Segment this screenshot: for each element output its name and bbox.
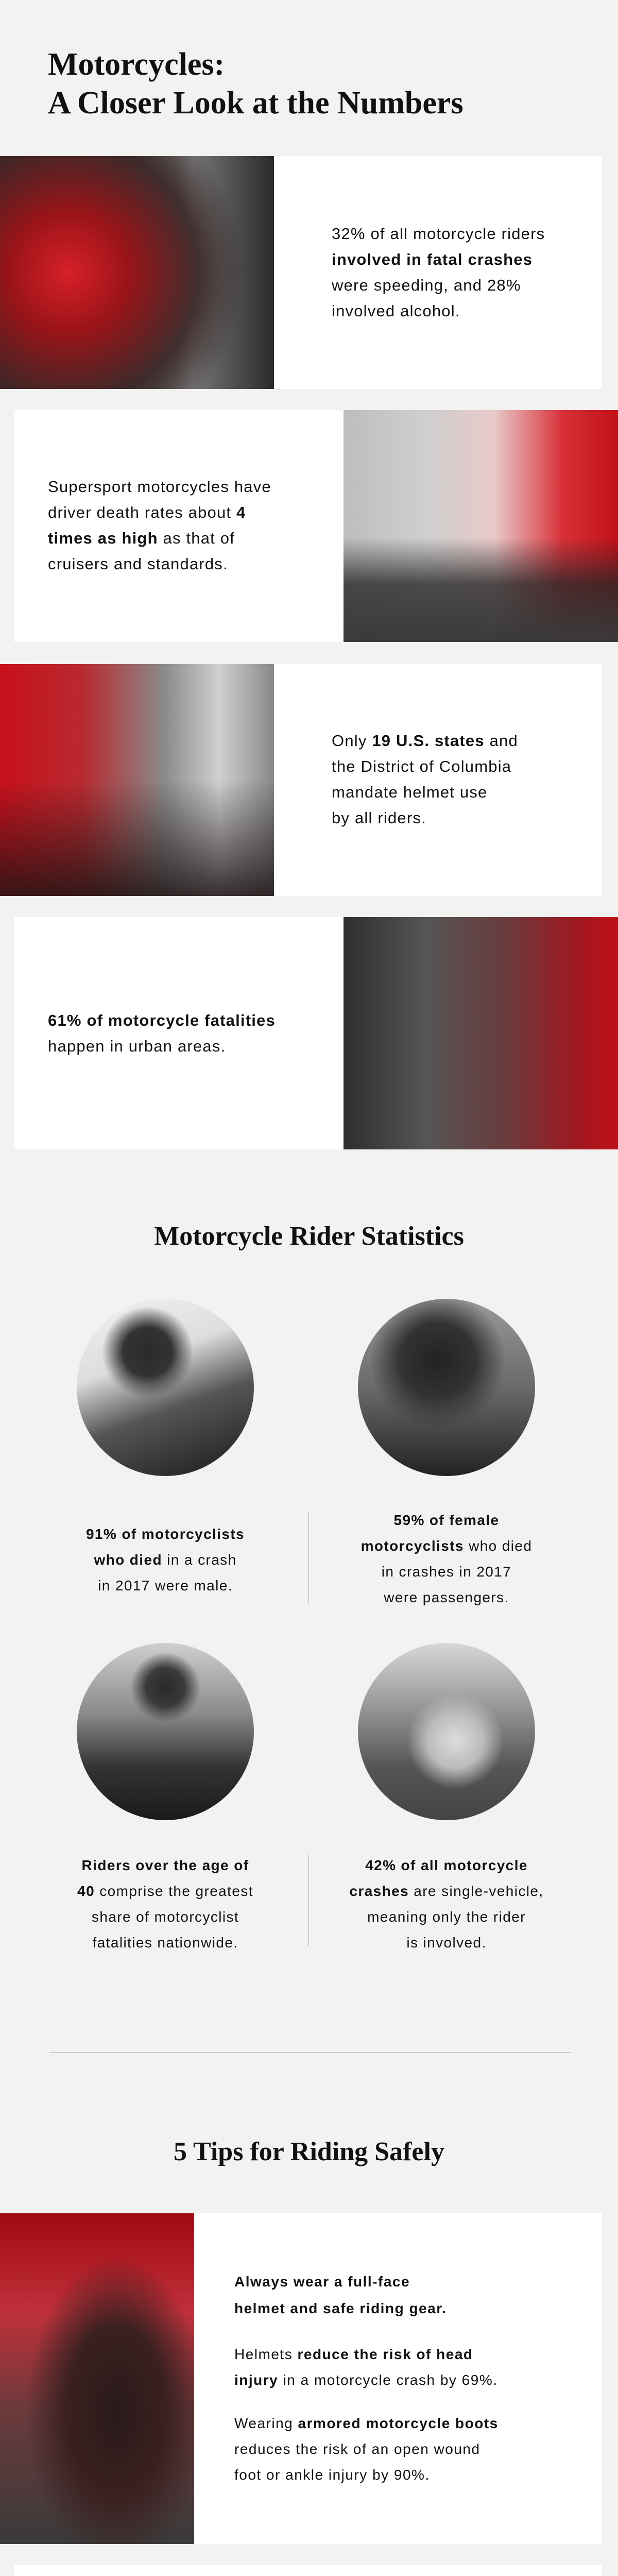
image: traffic — [344, 917, 618, 1149]
text block: mandate helmet use — [332, 783, 487, 801]
text: crashes are single-vehicle, — [349, 1883, 544, 1899]
text: in 2017 were male. — [98, 1578, 233, 1594]
photo: couple on motorcycle — [358, 1299, 535, 1476]
panel: helmet tip — [0, 2213, 602, 2544]
title: Motorcycles: — [48, 47, 225, 82]
text block: involved alcohol. — [332, 302, 460, 320]
text — [361, 1512, 532, 1605]
text — [77, 1857, 253, 1951]
text block: the District of Columbia — [332, 757, 511, 775]
title: A Closer Look at the Numbers — [48, 86, 464, 121]
stat: over 40 — [77, 1643, 254, 1951]
text block: 32% of all motorcycle riders — [332, 225, 545, 243]
text: motorcyclists who died — [361, 1538, 532, 1554]
divider — [49, 2052, 571, 2053]
text: is involved. — [406, 1935, 487, 1951]
text block — [194, 2213, 602, 2544]
tip paragraph 2: foot or ankle injury by 90%. — [234, 2467, 430, 2483]
text block: involved in fatal crashes — [332, 250, 533, 268]
text: share of motorcyclist — [92, 1909, 239, 1925]
text: meaning only the rider — [367, 1909, 526, 1925]
tip paragraph 1: injury in a motorcycle crash by 69%. — [234, 2372, 498, 2388]
text block — [14, 917, 344, 1149]
divider — [308, 1512, 309, 1603]
text: 40 comprise the greatest — [77, 1883, 253, 1899]
text: in crashes in 2017 — [382, 1564, 511, 1580]
text: Riders over the age of — [82, 1857, 249, 1873]
tip paragraph 1 — [234, 2346, 498, 2388]
stat: female passengers — [358, 1299, 535, 1605]
text block: were speeding, and 28% — [332, 276, 521, 294]
panel: urban — [14, 917, 618, 1149]
tip paragraph 1: Helmets reduce the risk of head — [234, 2346, 473, 2362]
heading: tips: 5 Tips for Riding Safely — [174, 2137, 444, 2166]
text block: happen in urban areas. — [48, 1037, 226, 1055]
text: 91% of motorcyclists — [86, 1526, 245, 1542]
text: 42% of all motorcycle — [365, 1857, 528, 1873]
tip heading: Always wear a full-face — [234, 2274, 410, 2290]
stat: male — [77, 1299, 254, 1594]
text block: by all riders. — [332, 809, 426, 827]
text block: driver death rates about 4 — [48, 503, 246, 521]
image: beer tap — [0, 156, 274, 389]
tip heading: helmet and safe riding gear. — [234, 2300, 447, 2316]
text: fatalities nationwide. — [93, 1935, 238, 1951]
tip paragraph 2: reduces the risk of an open wound — [234, 2441, 480, 2457]
text block: Only 19 U.S. states and — [332, 732, 518, 750]
title — [48, 47, 464, 121]
image: crashed motorcycle — [344, 410, 618, 642]
image: woman rider — [0, 664, 274, 896]
panel: speeding and alcohol — [0, 156, 602, 389]
text block: 61% of motorcycle fatalities — [48, 1011, 276, 1029]
text block — [274, 664, 602, 896]
image: rider in red — [0, 2213, 194, 2544]
heading: rider statistics: Motorcycle Rider Statistics — [154, 1222, 464, 1251]
text: who died in a crash — [94, 1552, 237, 1568]
text block: Supersport motorcycles have — [48, 478, 271, 496]
tip paragraph 2: Wearing armored motorcycle boots — [234, 2415, 499, 2431]
photo: helmeted rider — [77, 1299, 254, 1476]
tip heading — [234, 2274, 447, 2316]
divider — [308, 1855, 309, 1946]
stat: single vehicle — [349, 1643, 544, 1951]
text block — [14, 410, 344, 642]
text — [86, 1526, 245, 1594]
photo: older rider — [77, 1643, 254, 1820]
text block — [274, 156, 602, 389]
text: 59% of female — [394, 1512, 499, 1528]
text block: cruisers and standards. — [48, 555, 228, 573]
text — [349, 1857, 544, 1951]
tip paragraph 2 — [234, 2415, 499, 2483]
text block: times as high as that of — [48, 529, 235, 547]
panel: supersport — [14, 410, 618, 642]
panel: checklist — [14, 2565, 602, 2576]
text: were passengers. — [384, 1589, 509, 1605]
panel: helmet laws — [0, 664, 602, 896]
photo: helmet on road — [358, 1643, 535, 1820]
